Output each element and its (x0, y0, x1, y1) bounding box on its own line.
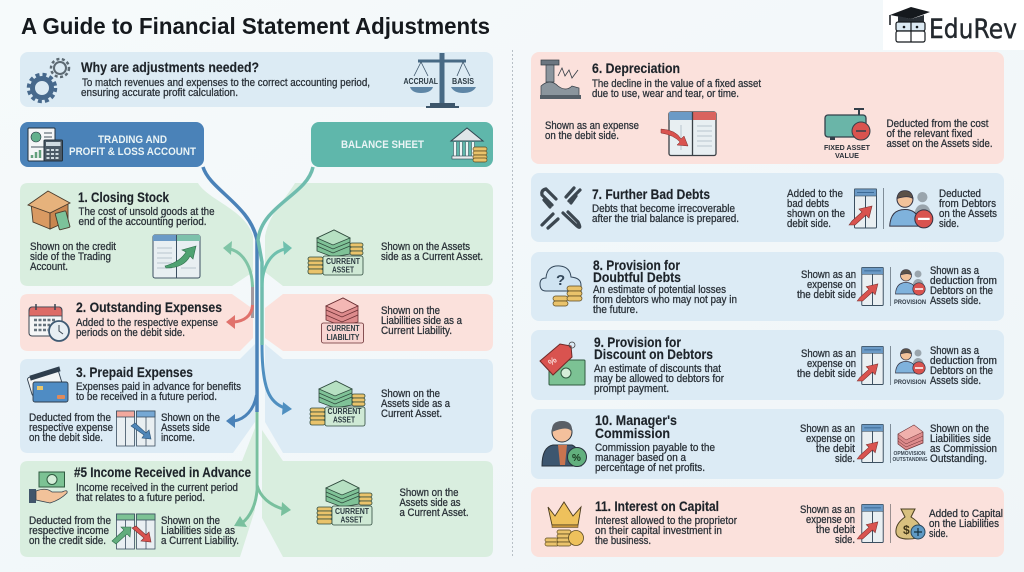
icon: current asset money (317, 480, 372, 525)
text: doubtful debts debit side: Shown as an (801, 269, 856, 281)
text: depreciation debit side (545, 120, 639, 142)
icon: current liability money (322, 298, 364, 343)
arrow: prepaid expenses right (262, 345, 292, 415)
text: commission debit side: expense on (806, 433, 855, 445)
text: bad debts debit side: bad debts (787, 198, 829, 210)
panel: 8 provision for doubtful debts (531, 252, 1004, 321)
text: commission description: percentage of net profits. (595, 462, 705, 474)
text: doubtful debts assets side: deduction from (930, 275, 997, 287)
text: outstanding description (76, 317, 218, 339)
heading: outstanding expenses: 2. Outstanding Expenses (76, 299, 222, 315)
arrow: closing stock to ledger (223, 241, 252, 287)
text: prepaid asset side: Assets side as a (381, 398, 451, 410)
panel: 10 manager's commission (531, 409, 1004, 479)
icon: provision debtors (894, 348, 926, 386)
icon: current asset money: CURRENT (335, 507, 369, 516)
icon: provision debtors: PROVISION (894, 380, 926, 386)
heading: trading and p&l: TRADING AND (98, 134, 167, 146)
text: depreciation assets side: of the relevant fixed (886, 128, 972, 140)
icon: manager with percent: % (572, 453, 581, 464)
heading: doubtful debts: 8. Provision for (593, 257, 680, 273)
text: discount assets side: Assets side. (930, 375, 981, 387)
panel: 6 depreciation (531, 52, 1004, 164)
text: income description: that relates to a future period. (76, 492, 205, 504)
heading: discount on debtors (594, 334, 713, 362)
icon: credit cards (27, 367, 68, 402)
text: bad debts debit side: shown on the (787, 208, 845, 220)
icon: ledger with arrow (857, 267, 883, 306)
text: discount debit side (797, 348, 856, 380)
text: bad debts assets side: side. (939, 218, 959, 230)
heading: discount on debtors: Discount on Debtors (594, 346, 713, 362)
icon: ledger with arrow (857, 424, 883, 463)
icon: manager with percent (542, 421, 586, 466)
text: prepaid asset side: Current Asset. (381, 408, 442, 420)
text: outstanding description: periods on the debit side. (76, 327, 185, 339)
header: balance sheet (311, 122, 493, 167)
heading: further bad debts: 7. Further Bad Debts (592, 186, 710, 202)
text: income liability side: a Current Liability. (161, 535, 239, 547)
text: interest liabilities side (929, 508, 1003, 540)
icon: calendar and clock (29, 304, 69, 341)
text: discount debit side: Shown as an (801, 348, 856, 360)
icon: outstanding red stack (892, 425, 928, 463)
text: why description (81, 77, 370, 99)
heading: prepaid expenses: 3. Prepaid Expenses (76, 364, 193, 380)
text: interest debit side: Shown as an (800, 504, 855, 516)
text: interest debit side: the debit (816, 524, 855, 536)
text: why description: To match revenues and expenses to the correct accounting period, (82, 77, 370, 89)
text: commission liabilities side: as Commission (930, 443, 997, 455)
text: prepaid asset side (381, 388, 451, 420)
icon: current asset money: ASSET (332, 266, 354, 274)
text: outstanding description: Added to the respective expense (76, 317, 218, 329)
text: closing stock description (78, 206, 214, 228)
text: why description: ensuring accurate profit calculation. (81, 87, 238, 99)
text: discount assets side: Debtors on the (930, 365, 993, 377)
text: closing stock description: The cost of unsold goods at the (78, 206, 214, 218)
icon: fixed asset value (824, 109, 870, 160)
text: commission description: manager based on a (595, 452, 687, 464)
panel: outstanding expenses (left) (20, 294, 253, 351)
text: discount description: An estimate of discounts that (594, 363, 721, 375)
text: discount debit side: expense on (807, 358, 856, 370)
icon: cardboard box (28, 191, 70, 230)
icon: provision debtors: PROVISION (894, 300, 926, 306)
text: interest debit side (800, 504, 855, 546)
text: depreciation debit side: on the debit side. (545, 130, 619, 142)
text: income asset side: Shown on the (400, 487, 458, 499)
text: income credit side: respective income (29, 525, 109, 537)
heading: why: Why are adjustments needed? (81, 59, 259, 75)
text: commission liabilities side: Shown on the (930, 423, 989, 435)
text: doubtful debts debit side: the debit side (797, 289, 856, 301)
icon: ledger with arrow (857, 346, 883, 385)
text: doubtful debts description: An estimate of potential losses (593, 284, 726, 296)
text: doubtful debts assets side (930, 265, 997, 307)
panel: income received in advance (left) (20, 428, 255, 557)
icon: ledger with arrow (849, 189, 876, 228)
text: prepaid assets side: Shown on the (161, 412, 220, 424)
text: prepaid description: to be received in a future period. (76, 391, 217, 403)
icon: balance scale: BASIS (452, 77, 475, 86)
text: interest liabilities side: Added to Capital (929, 508, 1003, 520)
icon: broken chains (542, 188, 580, 228)
text: commission liabilities side (930, 423, 997, 465)
panel: 11 interest on capital (531, 487, 1004, 557)
icon: ledgers with blue arrow (116, 411, 155, 446)
arrow: income left (234, 490, 257, 527)
icon: current liability money: LIABILITY (326, 333, 360, 342)
icon: ledger with arrow (857, 504, 883, 543)
heading: doubtful debts: Doubtful Debts (593, 269, 681, 285)
text: income credit side: on the credit side. (29, 535, 106, 547)
text: prepaid assets side: Assets side (161, 422, 210, 434)
text: outstanding liability side: Current Liability. (381, 325, 452, 337)
text: income credit side: Deducted from the (29, 515, 111, 527)
text: discount description: prompt payment. (594, 383, 669, 395)
icon: cloud and coins: ? (556, 272, 565, 289)
panel: income received in advance (right) (262, 430, 493, 557)
text: income liability side: Liabilities side as (161, 525, 235, 537)
text: income asset side: Assets side as (400, 497, 461, 509)
text: prepaid debit side: respective expense (29, 422, 113, 434)
title: A Guide to Financial Statement Adjustments (21, 13, 490, 39)
text: bad debts assets side: Deducted (939, 188, 981, 200)
icon: bank and coins (451, 128, 487, 162)
icon: current asset money: ASSET (340, 516, 363, 524)
text: discount assets side (930, 345, 997, 387)
heading: interest on capital: 11. Interest on Capital (595, 498, 719, 514)
text: depreciation description: due to use, wear and tear, or time. (592, 88, 739, 100)
text: closing stock asset side (381, 241, 483, 263)
panel: prepaid expenses (right) (265, 344, 493, 453)
text: closing stock asset side: side as a Current Asset. (381, 251, 483, 263)
text: discount debit side: the debit side (797, 368, 856, 380)
icon: current asset money: CURRENT (326, 257, 360, 266)
text: doubtful debts assets side: Assets side. (930, 295, 981, 307)
heading: balance sheet: BALANCE SHEET (341, 139, 424, 151)
text: bad debts debit side (787, 188, 845, 230)
text: interest debit side: side. (835, 534, 855, 546)
icon: price tag and cash: % (546, 355, 559, 368)
text: doubtful debts assets side: Debtors on the (930, 285, 993, 297)
text: commission liabilities side: Liabilities side (930, 433, 991, 445)
text: closing stock description: end of the accounting period. (78, 216, 206, 228)
icon: outstanding red stack: OPMOVISION (894, 451, 926, 457)
text: depreciation description (592, 78, 761, 100)
text: doubtful debts debit side (797, 269, 856, 301)
text: doubtful debts description: the future. (593, 304, 638, 316)
arrow: connector trunks (203, 167, 313, 490)
text: closing stock asset side: Shown on the Assets (381, 241, 470, 253)
icon: current asset money (308, 230, 363, 275)
text: commission debit side (800, 423, 855, 465)
text: depreciation assets side: Deducted from the cost (886, 118, 988, 130)
text: interest description (595, 515, 737, 547)
icon: cloud and coins (540, 266, 582, 306)
panel: prepaid expenses (left) (20, 344, 255, 453)
text: income asset side: a Current Asset. (400, 507, 468, 519)
text: closing stock treatment: Account. (30, 261, 68, 273)
text: outstanding liability side (381, 305, 463, 337)
text: prepaid description: Expenses paid in advance for benefits (76, 381, 241, 393)
panel: closing stock (right) (265, 183, 493, 286)
panel: 7 further bad debts (531, 173, 1004, 242)
text: bad debts assets side: from Debtors (939, 198, 996, 210)
heading: depreciation: 6. Depreciation (592, 60, 680, 76)
icon: fixed asset value: FIXED ASSET (824, 143, 870, 152)
heading: manager's commission: 10. Manager's (595, 412, 677, 428)
text: interest liabilities side: on the Liabilities (929, 518, 999, 530)
icon: gears (28, 59, 69, 102)
icon: ledger with green arrow (153, 235, 200, 278)
text: doubtful debts debit side: expense on (807, 279, 856, 291)
text: commission debit side: the debit (816, 443, 855, 455)
text: prepaid description (76, 381, 241, 403)
text: interest liabilities side: side. (929, 528, 948, 540)
text: outstanding liability side: Liabilities side as a (381, 315, 463, 327)
icon: balance scale (404, 53, 476, 108)
text: prepaid debit side: Deducted from the (29, 412, 111, 424)
text: prepaid asset side: Shown on the (381, 388, 440, 400)
text: income description (76, 482, 238, 504)
text: commission description (595, 442, 715, 474)
text: income credit side (29, 515, 111, 547)
text: income liability side: Shown on the (161, 515, 220, 527)
icon: current liability money: CURRENT (326, 324, 360, 333)
text: discount description (594, 363, 724, 395)
text: income liability side (161, 515, 239, 547)
icon: worn machine (540, 60, 581, 99)
icon: money bag with plus: $ (903, 523, 910, 537)
text: doubtful debts assets side: Shown as a (930, 265, 980, 277)
text: prepaid debit side: on the debit side. (29, 432, 103, 444)
arrow: income right (257, 485, 291, 516)
text: bad debts description (592, 203, 739, 225)
icon: current asset money: CURRENT (328, 407, 362, 416)
text: bad debts debit side: Added to the (787, 188, 843, 200)
heading: closing stock: 1. Closing Stock (78, 189, 169, 205)
panel: why adjustments (20, 52, 493, 108)
panel: closing stock (left) (20, 183, 253, 286)
text: outstanding liability side: Shown on the (381, 305, 440, 317)
text: prepaid assets side (161, 412, 220, 444)
text: prepaid assets side: income. (161, 432, 195, 444)
text: closing stock treatment (30, 241, 116, 273)
text: commission description: Commission payable to the (595, 442, 715, 454)
icon: fixed asset value: VALUE (835, 151, 859, 160)
text: commission debit side: Shown as an (800, 423, 855, 435)
logo: EduRev (883, 0, 1024, 50)
text: commission liabilities side: Outstanding. (930, 453, 987, 465)
heading: income received in advance: #5 Income Received in Advance (74, 464, 251, 480)
column divider (512, 50, 514, 557)
text: income asset side (400, 487, 468, 519)
text: doubtful debts description (593, 284, 737, 316)
heading: doubtful debts (593, 257, 681, 285)
icon: balance scale: ACCRUAL (404, 77, 438, 86)
text: bad debts assets side: on the Assets (939, 208, 997, 220)
icon: ledgers with green and red arrows (112, 514, 155, 549)
icon: price tag and cash (540, 342, 585, 385)
text: interest description: the business. (595, 535, 651, 547)
text: prepaid debit side (29, 412, 113, 444)
icon: outstanding red stack: OUTSTANDING (892, 457, 928, 463)
arrow: outstanding expenses (226, 305, 252, 329)
text: closing stock treatment: Shown on the credit (30, 241, 116, 253)
text: interest debit side: expense on (806, 514, 855, 526)
text: discount assets side: deduction from (930, 355, 997, 367)
icon: current asset money (310, 381, 365, 426)
arrow: closing stock to balance sheet (262, 241, 292, 287)
text: depreciation assets side (886, 118, 992, 150)
heading: manager's commission: Commission (595, 425, 670, 441)
text: interest description: on their capital investment in (595, 525, 722, 537)
text: discount assets side: Shown as a (930, 345, 980, 357)
icon: money bag with plus (896, 509, 925, 539)
heading: manager's commission (595, 412, 677, 441)
text: interest description: Interest allowed to the proprietor (595, 515, 737, 527)
icon: provision debtors (894, 270, 926, 306)
icon: report and calculator (28, 128, 62, 161)
text: bad debts description: after the trial balance is prepared. (592, 213, 739, 225)
heading: trading and p&l: PROFIT & LOSS ACCOUNT (69, 146, 196, 158)
heading: trading and p&l (69, 134, 196, 158)
icon: ledger with red arrow (661, 112, 716, 156)
text: commission debit side: side. (835, 453, 855, 465)
header: trading and profit & loss (20, 122, 204, 167)
text: depreciation assets side: asset on the Assets side. (886, 138, 992, 150)
arrow: prepaid expenses left (226, 395, 256, 428)
text: income description: Income received in the current period (76, 482, 238, 494)
text: bad debts debit side: debit side. (787, 218, 831, 230)
icon: crown and coins (545, 502, 584, 546)
text: bad debts assets side (939, 188, 997, 230)
icon: current asset money: ASSET (333, 416, 355, 424)
text: closing stock treatment: side of the Trading (30, 251, 111, 263)
text: discount description: may be allowed to debtors for (594, 373, 724, 385)
text: depreciation description: The decline in the value of a fixed asset (592, 78, 761, 90)
heading: discount on debtors: 9. Provision for (594, 334, 681, 350)
text: bad debts description: Debts that become irrecoverable (592, 203, 735, 215)
text: doubtful debts description: from debtors who may not pay in (593, 294, 737, 306)
panel: 9 provision for discount on debtors (531, 330, 1004, 400)
text: depreciation debit side: Shown as an expense (545, 120, 639, 132)
icon: debtors with minus (890, 191, 933, 228)
panel: outstanding expenses (right) (265, 294, 493, 351)
icon: cash and hand (29, 472, 67, 503)
